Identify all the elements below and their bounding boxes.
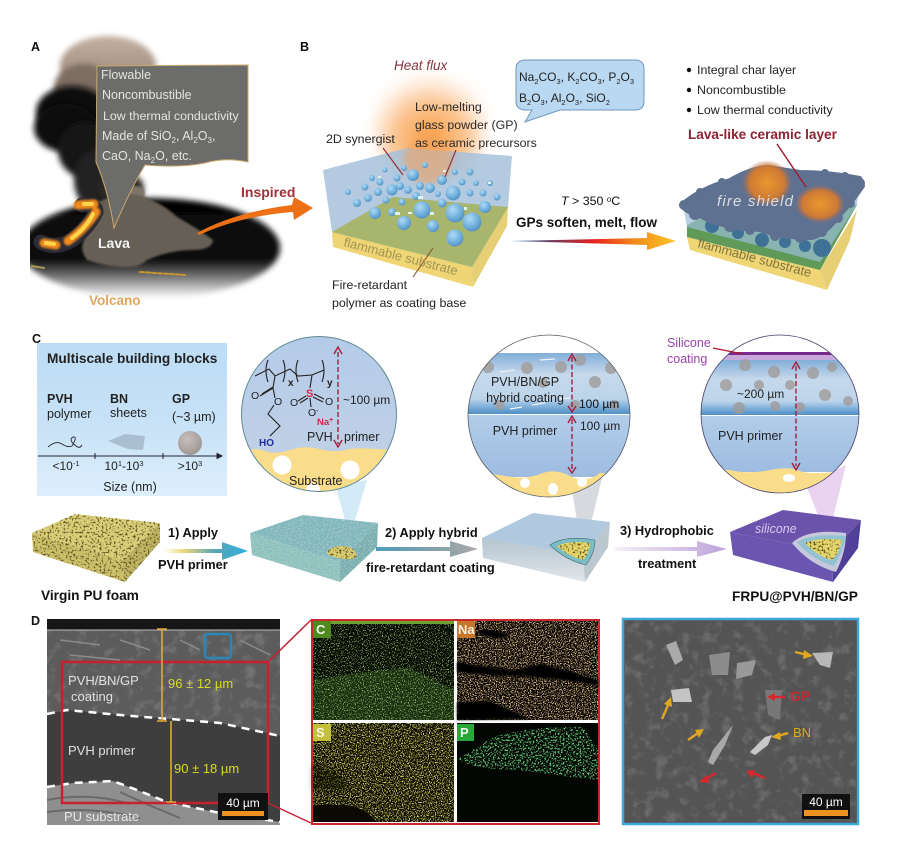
magnifier 2: hybrid coating <box>465 335 640 500</box>
map: sodium: Na <box>458 622 475 637</box>
hybrid coating label <box>486 375 564 438</box>
GP label: (~3 µm) <box>172 410 216 424</box>
step 1 upper text: 1) Apply <box>168 525 219 540</box>
axis tick labels: 3 <box>139 459 144 468</box>
flammable substrate label: flammable substrate <box>342 234 459 278</box>
annotation: low-melting glass powder: as ceramic precursors <box>415 136 537 150</box>
map: sulfur: S <box>316 725 325 740</box>
annotation: fire-retardant polymer <box>332 278 466 310</box>
magnifier 3: silicone coating <box>667 335 860 500</box>
axis tick labels: 1 <box>118 459 122 468</box>
property list: Low thermal conductivity <box>697 103 833 117</box>
silicone coating label: coating <box>667 352 707 366</box>
callout: lava properties: Made of SiO <box>102 129 171 143</box>
structure atoms: O <box>251 390 259 402</box>
ceramic layer block <box>679 160 865 290</box>
hybrid coating label: hybrid coating <box>486 391 564 405</box>
total thickness label: ~200 µm <box>737 387 784 401</box>
callout: glass oxides: 3 <box>630 77 634 86</box>
leader line: ceramic layer <box>777 144 806 187</box>
structure atoms: y <box>327 378 333 389</box>
property list: Noncombustible <box>697 83 786 97</box>
step 3 lower text: treatment <box>638 556 697 571</box>
callout: glass oxides: 3 <box>541 98 545 107</box>
callout: lava properties: 2 <box>171 136 176 145</box>
structure atoms: - <box>316 408 319 415</box>
GP label: GP <box>172 392 190 406</box>
callout: glass oxides: 2 <box>575 77 580 86</box>
zoom connector lines <box>268 620 311 823</box>
ceramic drips <box>705 219 831 257</box>
layered coating <box>700 352 860 500</box>
thickness bars <box>157 629 176 802</box>
flammable substrate label: flammable substrate <box>696 235 813 280</box>
glass powder spheres <box>345 162 500 246</box>
panel D: SEM cross-section <box>47 619 280 825</box>
property list <box>687 63 833 117</box>
BN label: sheets <box>110 406 147 420</box>
arrow: step 1 <box>158 525 248 572</box>
icon: GP sphere <box>178 431 202 455</box>
substrate label: Substrate <box>289 474 343 488</box>
coating label: coating <box>71 689 113 704</box>
callout: glass oxides: 2 <box>561 98 566 107</box>
flame core <box>404 136 452 184</box>
fire shield label: fire shield <box>717 193 794 210</box>
layered coating <box>465 353 640 500</box>
process label: GPs soften, melt, flow <box>516 215 658 230</box>
annotation: low-melting glass powder: glass powder (GP) <box>415 118 518 132</box>
scale bar <box>802 794 850 819</box>
panel A: volcano <box>20 36 280 308</box>
step 2 lower text: fire-retardant coating <box>366 560 495 575</box>
magnifier 1: PVH primer <box>240 336 400 500</box>
icon: polymer squiggle <box>48 437 82 447</box>
layer boundaries <box>47 710 280 822</box>
map: phosphorus <box>457 723 598 822</box>
callout: lava properties: Flowable <box>101 68 151 82</box>
arrow: inspired <box>197 184 313 235</box>
callout: glass oxides: 3 <box>575 98 579 107</box>
2D synergist flakes <box>378 170 491 215</box>
magnified region box <box>205 634 231 658</box>
callout: lava properties: Low thermal conductivity <box>103 109 239 123</box>
cone: hybrid magnifier <box>572 478 602 540</box>
BN label: BN <box>110 392 128 406</box>
PVH label: polymer <box>47 407 91 421</box>
coating label: PVH/BN/GP <box>68 673 139 688</box>
callout: glass oxides: O <box>566 91 575 105</box>
structure atoms: O <box>290 397 298 409</box>
structure atoms: S <box>306 388 313 400</box>
cone: silicone magnifier <box>806 465 846 530</box>
cutaway <box>792 532 846 572</box>
scale bar: 40 µm <box>226 796 260 810</box>
silicone coating label <box>667 336 711 366</box>
dimension arrow <box>334 347 342 447</box>
volcano label: Volcano <box>89 293 141 308</box>
heat flux label: Heat flux <box>394 58 449 73</box>
structure atoms: Na <box>317 417 329 428</box>
coating thickness: 96 ± 12 µm <box>168 676 233 691</box>
structure atoms: + <box>329 417 333 424</box>
panel D: SEM surface image <box>623 619 858 824</box>
callout: glass oxides: 2 <box>527 98 531 107</box>
label: FRPU@PVH/BN/GP <box>732 589 858 604</box>
primer label: PVH <box>307 430 333 444</box>
callout: lava properties: 2 <box>193 136 198 145</box>
thickness label primer: 100 µm <box>580 419 620 433</box>
callout: glass oxides: 2 <box>606 98 610 107</box>
process: virgin PU foam <box>32 514 160 603</box>
callout: glass oxides: 3 <box>557 77 561 86</box>
surface texture <box>625 621 856 822</box>
callout: lava properties: , <box>212 129 215 143</box>
coating block <box>323 148 512 287</box>
annotation: fire-retardant polymer: polymer as coating base <box>332 296 466 310</box>
callout: glass oxides: , SiO <box>579 91 606 105</box>
panel B label: B <box>300 40 309 54</box>
hybrid coating label: PVH primer <box>493 424 557 438</box>
axis tick labels: >10 <box>178 459 198 473</box>
eruption smoke plume <box>34 36 156 210</box>
structure atoms: O <box>308 407 316 419</box>
scale bar <box>218 793 268 820</box>
callout: glass oxides: , Al <box>545 91 561 105</box>
callout: glass oxides: CO <box>580 70 598 84</box>
callout: lava properties: CaO, Na <box>102 149 151 163</box>
label: Virgin PU foam <box>41 588 139 603</box>
callout: glass oxides: Na <box>519 70 534 84</box>
arrows: BN <box>662 650 813 740</box>
step 1 lower text: PVH primer <box>158 557 228 572</box>
volcano ground <box>20 198 280 298</box>
callout: glass oxides: , P <box>602 70 616 84</box>
panel D: EDS maps <box>312 620 599 824</box>
structure atoms: O <box>325 396 333 408</box>
primer thickness: 90 ± 18 µm <box>174 761 239 776</box>
primer thickness label: ~100 µm <box>343 393 390 407</box>
callout: lava properties: 3 <box>208 136 212 145</box>
thickness labels: 100 µm <box>579 397 619 411</box>
callout: lava properties: Noncombustible <box>102 88 192 102</box>
primer label: PVH primer <box>68 743 136 758</box>
leader lines <box>383 148 456 277</box>
callout: lava properties: 2 <box>151 156 156 165</box>
panel C: multiscale building blocks <box>37 343 227 496</box>
arrows: GP <box>699 693 785 783</box>
temperature label: C <box>611 194 620 208</box>
callout: glass oxides <box>516 60 644 122</box>
callout: glass oxides: O <box>531 91 541 105</box>
arrow: heat to ceramic <box>510 232 676 250</box>
substrate label: PU substrate <box>64 809 139 824</box>
property list: Integral char layer <box>697 63 796 77</box>
arrow: step 3 <box>615 523 727 571</box>
panel C label: C <box>32 332 41 346</box>
GP label: GP <box>790 688 810 704</box>
EDS region box <box>62 662 268 803</box>
fire spots <box>742 160 792 206</box>
annotation: low-melting glass powder <box>415 100 537 150</box>
lava label: Lava <box>98 235 130 251</box>
annotation: 2D synergist: 2D synergist <box>326 132 395 146</box>
inspired label: Inspired <box>241 184 295 200</box>
lava-like ceramic layer heading: Lava-like ceramic layer <box>688 127 838 142</box>
callout: glass oxides: 3 <box>598 77 602 86</box>
PVH chemical structure <box>255 360 324 436</box>
axis tick labels: -10 <box>122 459 140 473</box>
hybrid coating label: PVH/BN/GP <box>491 375 559 389</box>
callout: lava properties <box>96 65 248 228</box>
ceramic crust <box>679 167 865 243</box>
silicone label: silicone <box>755 522 797 536</box>
axis title: Size (nm) <box>103 480 157 494</box>
exposed foam patch <box>327 546 356 559</box>
BN label: BN <box>793 725 811 740</box>
scale bar: 40 µm <box>809 795 843 809</box>
map: sulfur <box>313 723 454 822</box>
map: phosphorus: P <box>460 725 469 740</box>
temperature label: o <box>607 195 612 204</box>
callout: glass oxides: CO <box>539 70 557 84</box>
block heading: Multiscale building blocks <box>47 351 218 366</box>
cutaway <box>550 538 595 565</box>
process: hybrid coated foam <box>482 513 610 582</box>
leader line: silicone <box>713 348 743 354</box>
dimension arrow <box>792 362 800 470</box>
lava flow <box>32 204 185 275</box>
structure atoms <box>251 378 333 449</box>
map: sodium <box>457 621 598 720</box>
annotation: fire-retardant polymer: Fire-retardant <box>332 278 408 292</box>
cross-section layers <box>47 619 280 825</box>
step 3 upper text: 3) Hydrophobic <box>620 523 714 538</box>
map: carbon <box>313 621 454 720</box>
panel D label: D <box>31 614 40 628</box>
structure atoms: O <box>274 396 282 408</box>
coating label <box>68 673 139 704</box>
map: carbon: C <box>316 622 326 637</box>
callout: glass oxides: , K <box>561 70 575 84</box>
lava mountain <box>82 194 213 267</box>
callout: glass oxides: 2 <box>534 77 539 86</box>
flame <box>372 62 488 182</box>
primer label second word: primer <box>344 430 379 444</box>
PVH label: PVH <box>47 392 73 406</box>
axis tick labels: <10 <box>52 459 73 473</box>
panel B: coating illustration <box>323 58 865 310</box>
step 2 upper text: 2) Apply hybrid <box>385 525 478 540</box>
silicone coating label: Silicone <box>667 336 711 350</box>
annotation: low-melting glass powder: Low-melting <box>415 100 482 114</box>
substrate layer <box>250 447 388 491</box>
BN flakes <box>666 641 833 765</box>
axis tick labels: -1 <box>73 459 80 468</box>
cone: primer magnifier <box>335 480 367 530</box>
callout: lava properties: O <box>198 129 208 143</box>
callout: glass oxides: O <box>621 70 630 84</box>
structure atoms: x <box>288 378 294 389</box>
axis tick labels: 3 <box>198 459 202 468</box>
arrow: step 2 <box>366 525 495 575</box>
dimension arrows <box>568 354 576 473</box>
primer label: PVH primer <box>718 429 783 443</box>
size axis <box>38 453 222 459</box>
process: FRPU final foam <box>730 510 861 604</box>
axis tick labels: 10 <box>104 459 118 473</box>
callout: lava properties: , Al <box>176 129 193 143</box>
temperature label: T > 350 <box>561 194 603 208</box>
icon: BN sheet <box>108 434 145 450</box>
callout: lava properties: O, etc. <box>155 149 192 163</box>
structure atoms: HO <box>259 438 274 449</box>
callout: glass oxides: B <box>519 91 527 105</box>
panel label A: A <box>31 40 40 54</box>
axis tick labels <box>52 459 202 473</box>
process: primed foam <box>250 515 378 582</box>
callout: glass oxides: 2 <box>616 77 621 86</box>
